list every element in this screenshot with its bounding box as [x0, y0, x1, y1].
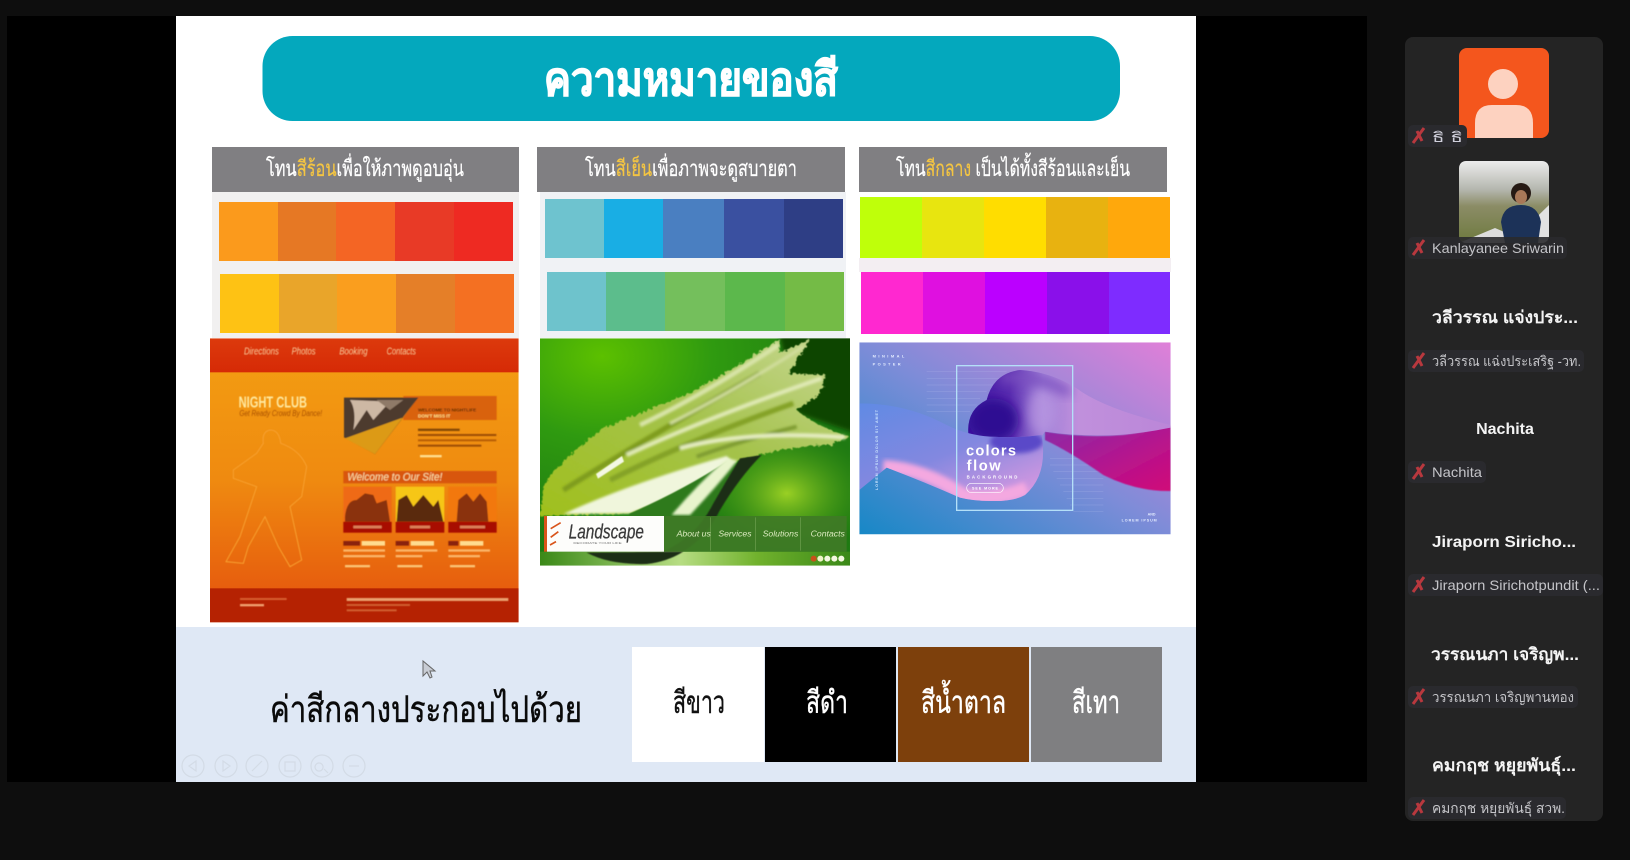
image: green plant website [540, 338, 850, 566]
image: night club website: WELCOME TO NIGHTLIFE [418, 407, 476, 412]
slideshow controls [182, 755, 365, 777]
purple blob [968, 370, 1170, 438]
water drop [629, 463, 736, 516]
image: green plant website: About us [676, 529, 712, 539]
participant tile: Nachita: Nachita [1432, 464, 1482, 480]
participant tile: Kanlayanee [1408, 161, 1567, 259]
participant tile: avatar [1408, 48, 1549, 147]
swatch: black [765, 647, 896, 762]
image: night club website: Contacts [387, 347, 416, 358]
heading: cool tones: โทนสีเย็นเพื่อภาพจะดูสบายตา [585, 153, 797, 182]
cool swatches row 2 [547, 272, 844, 331]
swatch: brown [898, 647, 1029, 762]
participant tile: Walaiwan: วลีวรรณ แจ่งประ... [1432, 307, 1578, 327]
bottom strip [540, 552, 850, 566]
panel: cool tones [537, 147, 846, 338]
heading: warm tones: โทนสีร้อนเพื่อให้ภาพดูอบอุ่น [266, 153, 464, 182]
image: green plant website: Contacts [811, 529, 845, 539]
image: green plant website: Services [718, 529, 752, 539]
heading: cool tones [537, 147, 845, 192]
text: neutral values heading: ค่าสีกลางประกอบไปด้วย [270, 688, 582, 730]
neutral swatches row 1 [860, 197, 1170, 258]
swatch: gray: สีเทา [1072, 685, 1120, 720]
participant tile: Wannapa: วรรณนภา เจริญพานทอง [1432, 689, 1574, 705]
lines pattern [927, 372, 1103, 512]
image: colors flow poster: colors [966, 444, 1016, 460]
image: colors flow poster: LOREM IPSUM DOLOR SIT AMET [875, 409, 879, 490]
cool swatches row 1 [545, 199, 843, 258]
swatch: black: สีดำ [806, 685, 848, 720]
video area background [7, 16, 1367, 782]
image: colors flow poster: AND [1148, 513, 1156, 517]
participant tile: Jiraporn: Jiraporn Sirichotpundit (... [1432, 577, 1600, 593]
heading: warm tones [212, 147, 519, 192]
bottom panel: neutral values [176, 627, 1196, 782]
participants panel [1405, 37, 1603, 821]
image: colors flow poster: SEE MORE [972, 486, 999, 490]
slide [176, 16, 1196, 782]
participant tile: avatar: ธิ ธิ [1432, 129, 1463, 145]
swatch: white: สีขาว [673, 685, 725, 720]
participant tile: Khomkrit [1408, 755, 1576, 819]
image: night club website: Directions [244, 347, 279, 358]
image: night club website: Photos [292, 347, 316, 358]
image: night club website: Welcome to Our Site! [347, 472, 443, 484]
image: colors flow poster: LOREM IPSUM [1122, 518, 1157, 522]
image: colors flow poster: flow [967, 458, 1001, 474]
participant tile: Khomkrit: คมกฤช หยุยพันธุ์ สวพ. [1432, 800, 1565, 817]
image: night club website: Get Ready Crowd By Dance! [239, 409, 323, 418]
panel: neutral tones [859, 147, 1171, 334]
icon: mouse cursor [423, 661, 435, 678]
participant tile: Wannapa [1408, 645, 1579, 708]
image: colors flow poster: POSTER [873, 361, 901, 366]
participant tile: Nachita [1408, 421, 1534, 483]
neutral swatches row 2 [861, 272, 1170, 334]
flowing band [860, 404, 1044, 501]
title banner: ความหมายของสี [544, 53, 839, 105]
leaf shape [540, 339, 849, 564]
title banner [262, 36, 1120, 121]
image: night club website: Booking [339, 347, 368, 358]
panel: warm tones [212, 147, 519, 338]
participant tile: Khomkrit: คมกฤช หยุยพันธุ์... [1432, 755, 1576, 776]
image: night club website: NIGHT CLUB [239, 394, 307, 411]
image: colors flow poster: MINIMAL [873, 354, 905, 359]
swatch: white [632, 647, 764, 762]
warm swatches row 1 [219, 202, 513, 261]
logo box: DECORATE YOUR LIFE [573, 541, 622, 545]
participant tile: Kanlayanee: Kanlayanee Sriwarin [1432, 240, 1564, 256]
swatch: gray [1031, 647, 1162, 762]
image: night club website [210, 338, 519, 622]
warm swatches row 2 [220, 274, 514, 333]
participant tile: Walaiwan: วลีวรรณ แฉ่งประเสริฐ -วท. [1432, 353, 1581, 370]
swatch: brown: สีน้ำตาล [921, 680, 1006, 720]
magenta ribbon [1045, 426, 1171, 491]
image: green plant website: Solutions [763, 529, 799, 539]
image: night club website: DON'T MISS IT [418, 413, 451, 418]
participant tile: Nachita: Nachita [1476, 421, 1534, 438]
heading: neutral tones [859, 147, 1167, 192]
participant tile: Wannapa: วรรณนภา เจริญพ... [1431, 645, 1579, 665]
heading: neutral tones: โทนสีกลาง เป็นได้ทั้งสีร้อนและเย็น [896, 153, 1130, 181]
image: colors flow poster [857, 342, 1173, 534]
logo box [544, 516, 664, 552]
participant tile: Walaiwan [1408, 307, 1584, 372]
logo box: Landscape [569, 520, 644, 543]
participant tile: Jiraporn: Jiraporn Siricho... [1432, 534, 1576, 551]
image: colors flow poster: BACKGROUND [967, 474, 1017, 479]
participant tile: Jiraporn [1408, 534, 1603, 596]
